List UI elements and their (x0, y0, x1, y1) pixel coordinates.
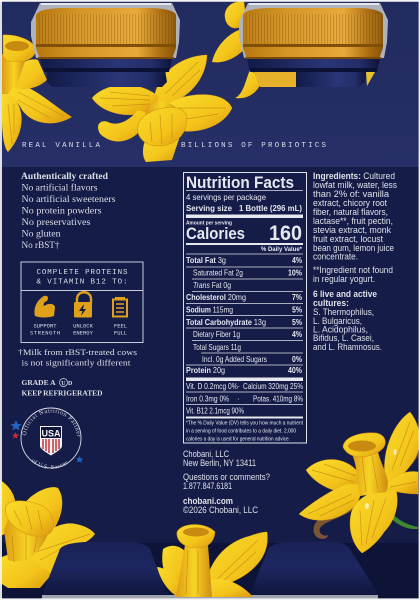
claims list: No gluten (22, 230, 61, 240)
live cultures: 6 live and active (313, 289, 377, 299)
vitamins and minerals (186, 382, 303, 416)
live cultures: and L. Rhamnosus. (313, 342, 382, 352)
nutrient rows: Incl. 0g Added Sugars (202, 355, 267, 364)
nutrient rows: 0% (292, 355, 303, 364)
vitamins and minerals: Vit. B12 2.1mcg 90% (186, 406, 244, 416)
nutrient rows: 5% (292, 306, 303, 314)
badge: US Soccer partner: of U.S. Soccer (32, 460, 68, 469)
flower: bottom right bloom (299, 412, 420, 553)
daily value footnote: *The % Daily Value (DV) tells you how much a nutrient (186, 420, 303, 426)
icon label: support strength: STRENGTH (30, 330, 60, 336)
lower shadow band (0, 543, 420, 600)
icon label: feel full: FEEL (114, 322, 127, 330)
live cultures: L. Bulgaricus, (313, 316, 362, 326)
grade A storage text: GRADE A (22, 379, 56, 387)
flower: top left bloom (2, 35, 72, 152)
icon: battery full (113, 297, 127, 316)
icon: USA shield: USA (42, 428, 61, 440)
grade A storage text (22, 378, 102, 398)
icon label: unlock energy: ENERGY (73, 330, 94, 336)
ingredients: lowfat milk, water, less (313, 180, 397, 190)
company contact details: New Berlin, NY 13411 (183, 458, 256, 468)
label: billions of probiotics: BILLIONS OF PROBIOTICS (181, 142, 326, 150)
bottle base: left (42, 542, 167, 595)
daily value header: % Daily Value* (261, 247, 303, 253)
claims list: No rBST† (22, 241, 60, 251)
serving information: Serving size (186, 203, 232, 213)
vitamins and minerals: Vit. D 0.2mcg 0%· (186, 382, 240, 391)
nutrient rows: Saturated Fat 2g (193, 268, 243, 278)
upper label band (0, 0, 420, 167)
live cultures: Bifidus, L. Casei, (313, 333, 374, 343)
serving information (186, 192, 302, 213)
ingredients: concentrate. (313, 252, 358, 262)
panel: complete proteins (21, 262, 143, 342)
calories: Calories (186, 224, 245, 243)
ingredients (313, 171, 397, 262)
badge: US Soccer partner (10, 408, 83, 469)
nutrient rows: Total Sugars 11g (193, 343, 241, 352)
nutrient rows: Total Carbohydrate 13g (186, 318, 266, 327)
vitamins and minerals: Iron 0.3mg 0% (186, 394, 229, 404)
claims list: Authentically crafted (21, 172, 109, 182)
claims list: No protein powders (22, 206, 102, 216)
live cultures: S. Thermophilus, (313, 307, 374, 317)
heading: nutrition facts: Nutrition Facts (186, 174, 294, 192)
ingredients: fruit extract, locust (313, 234, 383, 244)
vitamins and minerals: Calcium 320mg 25% (243, 382, 303, 391)
claims list (21, 172, 116, 251)
grade A storage text: D (68, 381, 73, 387)
nutrient rows: Protein 20g (186, 366, 225, 375)
nutrient rows: 7% (292, 293, 303, 302)
ingredients: bean gum, lemon juice (313, 243, 394, 253)
company contact details: chobani.com (183, 496, 233, 506)
calories: 160 (269, 222, 302, 245)
daily value footnote: in a serving of food contributes to a daily diet. 2,000 (186, 428, 296, 434)
nutrient rows: Cholesterol 20mg (186, 293, 246, 302)
vitamins and minerals: · (237, 394, 240, 404)
daily value footnote: calories a day is used for general nutrition advice. (186, 436, 290, 442)
nutrient rows: 40% (288, 366, 303, 375)
company contact details: ©2026 Chobani, LLC (183, 505, 258, 515)
flower: top right behind cap (212, 2, 375, 98)
live cultures: L. Acidophilus, (313, 324, 368, 334)
company contact details: Questions or comments? (183, 472, 270, 482)
rBST footnote: †Milk from rBST-treated cows (18, 347, 138, 357)
nutrient rows: Trans Fat 0g (193, 281, 231, 290)
panel: nutrition facts (184, 172, 306, 443)
nutrient rows: 5% (292, 318, 303, 327)
live cultures: cultures: (313, 298, 349, 308)
flower: bottom centre bloom (157, 524, 267, 597)
claims list: No artificial flavors (22, 182, 98, 194)
nutrient rows: 4% (292, 330, 303, 339)
bottle base: far right edge (42, 595, 378, 598)
flower: bottom left bloom (0, 480, 95, 588)
nutrient rows: 4% (292, 256, 303, 265)
bottle cap: right (239, 3, 388, 87)
nutrient rows: Total Fat 3g (186, 256, 226, 265)
icon label: feel full (114, 322, 127, 336)
ingredient footnote: in regular yogurt. (313, 274, 375, 284)
icon label: feel full: FULL (114, 330, 127, 336)
ingredient footnote: **Ingredient not found (313, 265, 393, 275)
daily value footnote (186, 420, 303, 442)
icon: stars (10, 420, 83, 463)
company contact details: 1.877.847.6181 (183, 481, 232, 491)
badge: US Soccer partner: Official Nutrition Partner (22, 408, 80, 437)
ingredients: Ingredients: Cultured (313, 171, 395, 181)
nutrient rows (186, 254, 303, 375)
panel: complete proteins: & VITAMIN B12 TO: (36, 278, 128, 286)
icon: unlocked padlock (74, 292, 92, 318)
claims list: No preservatives (22, 218, 91, 228)
bottle cap: left (31, 3, 180, 87)
bottle base: right (250, 542, 377, 595)
grade A storage text: U (61, 381, 66, 387)
serving information: 4 servings per package (186, 192, 266, 202)
icon label: unlock energy: UNLOCK (73, 322, 94, 330)
vitamins and minerals: Potas. 410mg 8% (253, 394, 303, 404)
company contact details: Chobani, LLC (183, 449, 229, 459)
nutrient rows: Dietary Fiber 1g (193, 330, 240, 339)
nutrient rows: Sodium 115mg (186, 306, 233, 314)
ingredients: stevia extract, monk (313, 225, 391, 235)
rBST footnote (18, 347, 138, 368)
claims list: No artificial sweeteners (22, 194, 116, 205)
icon label: support strength: SUPPORT (33, 322, 57, 330)
grade A storage text: KEEP REFRIGERATED (22, 390, 102, 398)
flower: top centre vanilla bloom (92, 55, 232, 162)
rBST footnote: is not significantly different (22, 358, 131, 368)
ingredients: than 2% of: vanilla (313, 189, 389, 199)
panel: complete proteins: COMPLETE PROTEINS (36, 269, 128, 277)
ingredients: fiber, natural flavors, (313, 207, 388, 217)
ingredients: extract, chicory root (313, 198, 387, 208)
calories (186, 220, 302, 245)
ingredient footnote (313, 265, 393, 284)
calories: Amount per serving (186, 220, 232, 226)
label: real vanilla: REAL VANILLA (22, 142, 100, 150)
icon label: unlock energy (73, 322, 94, 336)
company contact details (183, 449, 270, 515)
icon label: support strength (30, 322, 60, 336)
live cultures (313, 289, 382, 352)
nutrient rows: 10% (288, 268, 303, 278)
icon: flexed arm (34, 296, 55, 318)
ingredients: lactase**, fruit pectin, (313, 216, 393, 226)
serving information: 1 Bottle (296 mL) (239, 203, 302, 213)
